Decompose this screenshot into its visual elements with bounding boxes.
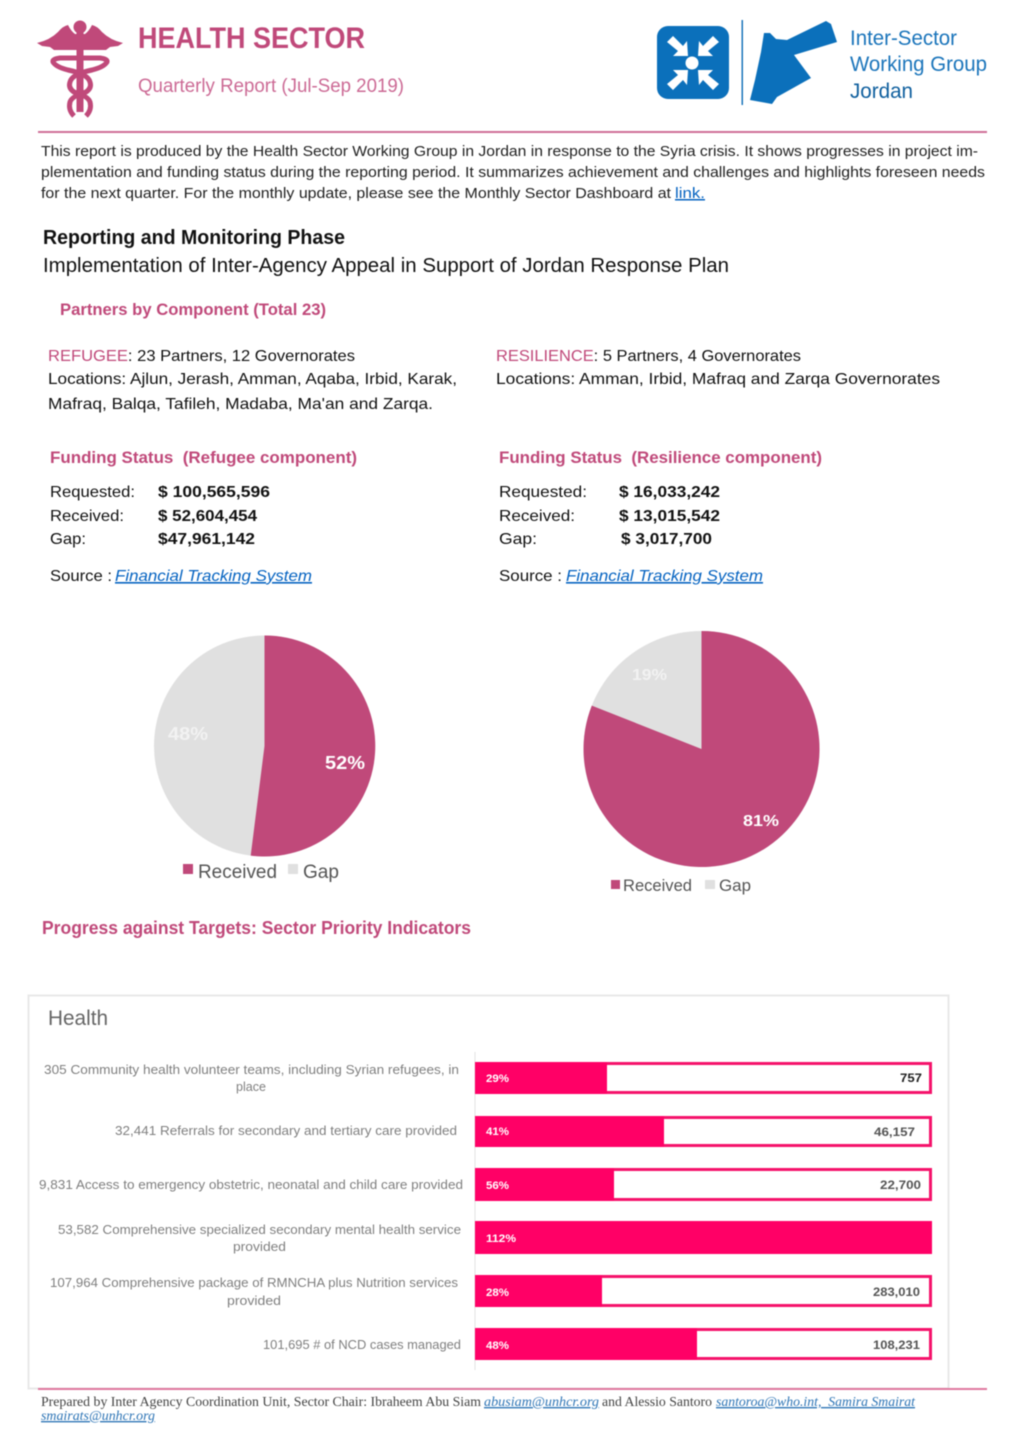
funding status: resilience: Gap: (499, 531, 537, 548)
indicator: NCD cases (263, 1328, 930, 1360)
indicator: emergency obstetric care (39, 1168, 930, 1201)
indicator: community health volunteer teams: place (236, 1080, 266, 1094)
icon: map of Jordan (750, 21, 837, 104)
pie chart: resilience funding: Received (623, 877, 692, 895)
pie chart: resilience funding (584, 631, 820, 895)
heading: partners by component: Partners by Component (Total 23) (60, 301, 326, 319)
funding status: resilience (499, 448, 822, 585)
panel: health indicators (28, 996, 948, 1388)
indicator: referrals: 32,441 Referrals for secondary and tertiary care provided (115, 1124, 457, 1138)
header (37, 20, 987, 116)
icon: inter-sector coordination logo (657, 20, 743, 105)
pie chart: refugee funding: 52% (325, 753, 365, 773)
resilience partners: RESILIENCE: 5 Partners, 4 Governorates (496, 348, 801, 365)
indicator: NCD cases: 48% (486, 1340, 509, 1352)
indicator: RMNCHA package: 283,010 (873, 1285, 920, 1299)
indicator: community health volunteer teams (44, 1062, 930, 1094)
indicator: referrals: 46,157 (874, 1125, 915, 1139)
indicator: mental health service (58, 1221, 932, 1254)
indicator: community health volunteer teams: 305 Community health volunteer teams, including Syrian refugees, in (44, 1063, 459, 1077)
panel title: Health (48, 1007, 108, 1030)
intro text: This report is produced by the Health Sector Working Group in Jordan in response to the Syria crisis. It shows progresses in project im- (41, 143, 978, 160)
indicator: community health volunteer teams: 29% (486, 1073, 509, 1085)
logo text: Inter-Sector (850, 27, 957, 50)
logo text: Jordan (850, 80, 913, 103)
footer credits: smairats@unhcr.org (41, 1408, 155, 1423)
indicator: emergency obstetric care: 9,831 Access to emergency obstetric, neonatal and child care provided (39, 1178, 463, 1192)
indicator: NCD cases: 101,695 # of NCD cases managed (263, 1338, 461, 1352)
indicator: RMNCHA package: provided (227, 1294, 281, 1308)
resilience partners (496, 348, 940, 388)
funding status: refugee: $ 52,604,454 (158, 508, 257, 525)
indicator: referrals: 41% (486, 1126, 509, 1138)
refugee partners: Locations: Ajlun, Jerash, Amman, Aqaba, Irbid, Karak, (48, 371, 457, 388)
indicator: community health volunteer teams: 757 (900, 1071, 922, 1085)
footer credits: santoroa@who.int, Samira Smairat (716, 1394, 916, 1409)
intro text (41, 143, 985, 202)
funding status: refugee: Received: (50, 508, 124, 525)
funding status: resilience: $ 16,033,242 (619, 484, 720, 501)
pie chart: refugee funding (154, 635, 375, 883)
pie chart: resilience funding: 19% (632, 667, 667, 684)
funding status: resilience: Financial Tracking System (566, 568, 763, 585)
funding status: refugee: Funding Status (Refugee component) (50, 448, 357, 467)
logo text: Working Group (850, 53, 987, 76)
funding status: refugee: Gap: (50, 531, 86, 548)
funding status: refugee (50, 448, 357, 585)
indicator: NCD cases: 108,231 (873, 1338, 920, 1352)
funding status: refugee: $47,961,142 (158, 531, 255, 548)
indicator: emergency obstetric care: 56% (486, 1180, 509, 1192)
funding status: refugee: $ 100,565,596 (158, 484, 270, 501)
funding status: refugee: Requested: (50, 484, 135, 501)
heading: reporting phase: Implementation of Inter-Agency Appeal in Support of Jordan Response Plan (43, 255, 729, 277)
footer credits: Prepared by Inter Agency Coordination Unit, Sector Chair: Ibraheem Abu Siam (41, 1394, 482, 1409)
indicator: RMNCHA package (50, 1275, 930, 1308)
funding status: resilience: Source : (499, 568, 562, 585)
intro text: plementation and funding status during the reporting period. It summarizes achievement and challenges and highlights foreseen needs (41, 164, 985, 181)
indicator: referrals (115, 1116, 930, 1147)
indicator: mental health service: provided (233, 1240, 286, 1254)
pie chart: refugee funding: 48% (168, 724, 208, 744)
indicator: RMNCHA package: 107,964 Comprehensive package of RMNCHA plus Nutrition services (50, 1276, 458, 1290)
indicator: emergency obstetric care: 22,700 (880, 1178, 921, 1192)
heading: reporting phase (43, 227, 729, 277)
funding status: resilience: Received: (499, 508, 575, 525)
indicator: mental health service: 112% (486, 1233, 516, 1245)
icon: caduceus (37, 20, 123, 116)
pie chart: resilience funding: Gap (719, 877, 751, 895)
heading: reporting phase: Reporting and Monitoring Phase (43, 227, 345, 249)
funding status: resilience: Requested: (499, 484, 587, 501)
title: HEALTH SECTOR (138, 22, 365, 55)
footer credits (41, 1394, 916, 1423)
refugee partners: REFUGEE: 23 Partners, 12 Governorates (48, 348, 355, 365)
intro text: link. (675, 185, 705, 202)
resilience partners: Locations: Amman, Irbid, Mafraq and Zarqa Governorates (496, 371, 940, 388)
heading: progress against targets: Progress against Targets: Sector Priority Indicators (42, 918, 471, 938)
refugee partners: Mafraq, Balqa, Tafileh, Madaba, Ma'an and Zarqa. (48, 396, 433, 413)
refugee partners (48, 348, 457, 413)
footer credits: abusiam@unhcr.org (484, 1394, 599, 1409)
footer credits: and Alessio Santoro (602, 1394, 712, 1409)
pie chart: refugee funding: Received (198, 862, 277, 883)
funding status: resilience: Funding Status (Resilience component) (499, 448, 822, 467)
indicator: RMNCHA package: 28% (486, 1287, 509, 1299)
pie chart: refugee funding: Gap (303, 862, 339, 883)
funding status: refugee: Source : (50, 568, 112, 585)
subtitle: Quarterly Report (Jul-Sep 2019) (138, 76, 404, 97)
intro text: for the next quarter. For the monthly update, please see the Monthly Sector Dashboard at (41, 185, 672, 202)
funding status: refugee: Financial Tracking System (115, 568, 312, 585)
funding status: resilience: $ 3,017,700 (621, 531, 712, 548)
pie chart: resilience funding: 81% (743, 813, 779, 830)
logo text (850, 27, 987, 103)
indicator: mental health service: 53,582 Comprehensive specialized secondary mental health service (58, 1223, 461, 1237)
funding status: resilience: $ 13,015,542 (619, 508, 720, 525)
